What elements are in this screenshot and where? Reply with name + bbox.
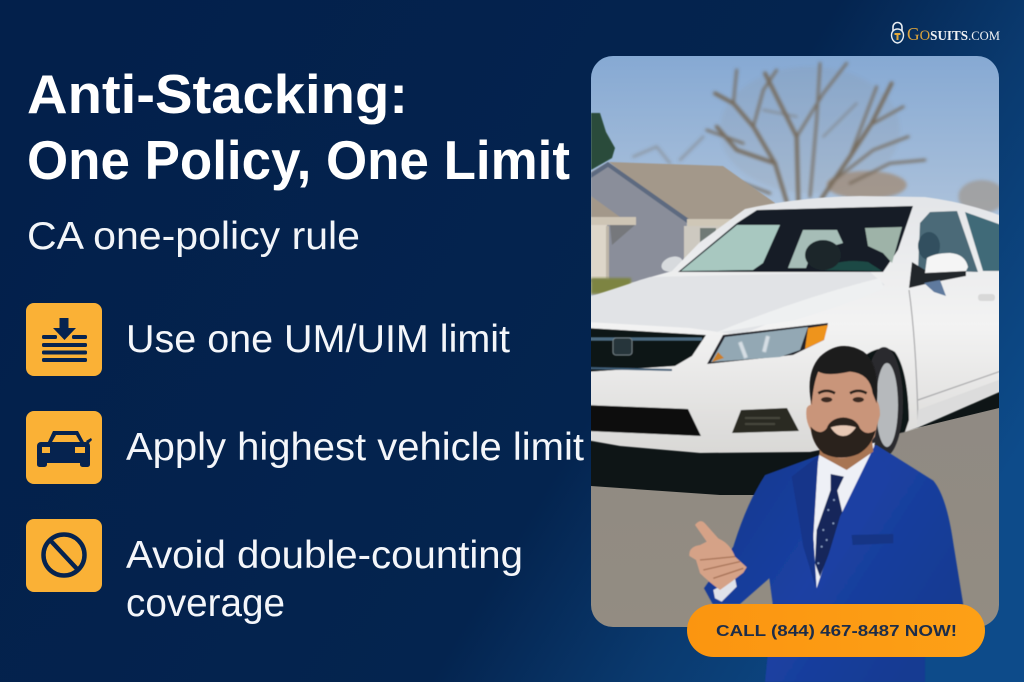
eyes and brows [818,391,867,402]
icon: car [26,411,102,484]
hand [689,521,747,590]
subtitle: CA one-policy rule [27,215,360,258]
panel: car photo [586,56,1005,630]
lapels [792,456,818,588]
mirror, far side [660,256,683,272]
call-to-action button [687,604,985,657]
side windows [918,211,978,272]
suit [704,445,963,682]
car body [586,196,1004,453]
fog lamp [732,408,799,433]
icon: stacked layers with down arrow [26,303,102,376]
pavement [591,408,999,627]
person [689,346,963,682]
wheel [866,348,910,434]
bare tree [633,63,1005,213]
lawn [591,278,631,294]
lower grille [586,405,701,436]
side mirror [909,262,966,288]
car [586,196,1004,457]
hood shade [586,272,885,335]
title [27,63,570,191]
wordmark: GOSUITS.COM [907,24,1000,44]
item: use one limit [26,303,510,376]
grille [586,328,706,372]
house [591,162,775,295]
icon: prohibition sign [26,519,102,592]
car shadow [591,385,999,495]
headlight [707,323,828,364]
label: apply highest limit: Apply highest vehicle limit [126,426,584,469]
face [806,361,880,458]
call-to-action button: CALL (844) 467-8487 NOW! [716,623,957,640]
icon: padlock [892,22,904,43]
neck [819,437,873,470]
shirt [813,443,875,588]
label: use one limit: Use one UM/UIM limit [126,318,510,361]
tie [815,474,844,577]
cuff [713,578,737,602]
label: avoid double-counting: Avoid double-counting [126,534,523,577]
beard [811,417,876,458]
item: avoid double-counting [26,519,523,625]
hair [810,346,877,405]
title: Anti-Stacking: [27,63,408,125]
logo [892,22,1000,44]
sky [591,56,999,316]
label: avoid double-counting [126,534,523,625]
evergreen tree [591,113,615,170]
door lines [909,290,918,420]
title: One Policy, One Limit [27,129,570,191]
label: avoid double-counting: coverage [126,582,285,625]
windshield [678,206,913,272]
item: apply highest limit [26,411,584,484]
